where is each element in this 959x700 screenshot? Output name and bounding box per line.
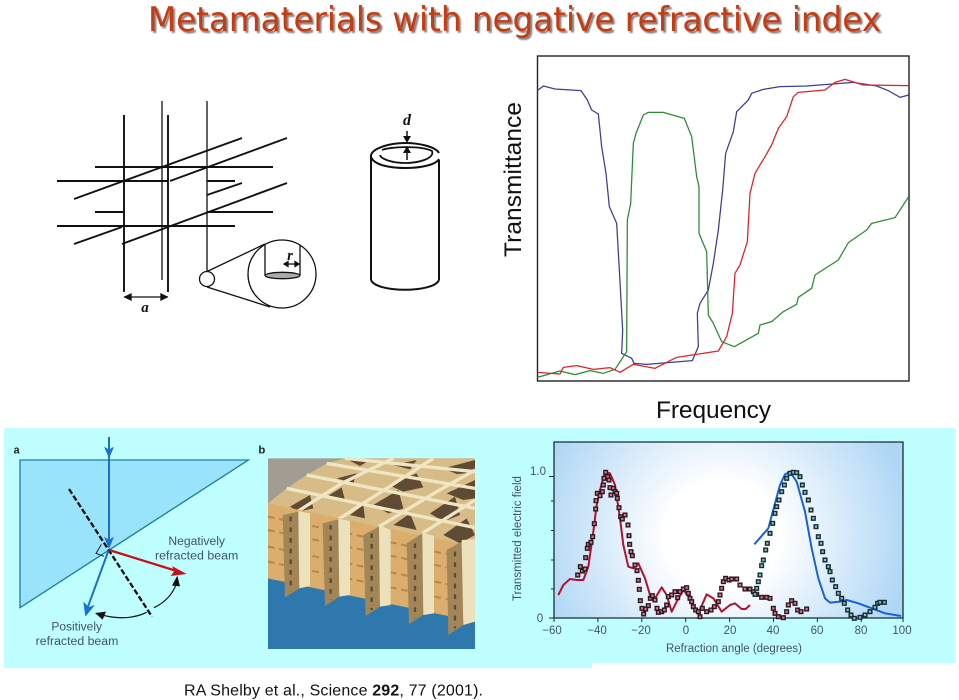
negatively refracted beam [109,550,187,576]
angle arc [95,576,180,620]
axis labels: 0 [537,613,543,625]
ticks [549,476,903,622]
axis labels: −20 [631,625,651,637]
thickness arrows and label d: d [403,112,412,129]
title: Metamaterials with negative refractive index [150,2,883,41]
beam labels: Positively [51,620,103,634]
title: Metamaterials with negative refractive index [148,0,881,39]
plot area [554,442,903,618]
axis labels: 20 [724,625,736,637]
panel letter b: b [258,444,265,456]
positively refracted beam [83,551,108,617]
incident beam [104,437,114,549]
axis labels [512,466,912,655]
panel b: metamaterial photo [268,458,475,649]
red simulated curve [558,472,807,618]
panel: cyan background [4,428,955,668]
blue series [754,472,901,618]
axis labels: 100 [892,625,912,637]
red measured points [578,472,807,618]
upper grid [268,458,475,550]
backdrop [268,458,475,649]
diagram: wire lattice [57,101,316,316]
beam labels: refracted beam [36,634,118,648]
beam labels: refracted beam [155,548,238,562]
axis labels: 0 [683,625,689,637]
spacing a: a [141,300,149,316]
y axis label: Transmittance [500,102,527,257]
chart: transmittance vs frequency [500,56,909,424]
blue curve [537,82,909,364]
axis labels: −60 [542,625,562,637]
panel c: refraction angle chart [512,442,912,655]
axis labels: 60 [811,625,823,637]
green curve [537,112,909,377]
lattice wires [57,101,287,292]
axis labels: Transmitted electric field [512,476,524,601]
red curve [537,79,909,374]
spacing a [124,294,168,316]
magnifier inset [200,240,316,308]
panel letter a: a [14,444,20,456]
axis labels: 80 [855,625,867,637]
axis labels: −40 [587,625,607,637]
normal line [69,489,152,617]
beam labels [36,534,238,648]
fins [283,511,475,635]
axis labels: Refraction angle (degrees) [666,643,802,655]
wedge [20,460,248,608]
plot frame [538,56,909,381]
panel a: refraction diagram [14,437,265,648]
thickness arrows and label d [403,112,412,160]
diagram: split cylinder [371,112,439,290]
front wall [268,503,475,622]
beam labels: Negatively [168,534,226,548]
axis labels: 1.0 [530,466,546,478]
x axis label: Frequency [656,397,772,424]
label r: r [287,248,293,264]
citation: RA Shelby et al., Science 292, 77 (2001). [184,682,483,700]
axis labels: 40 [767,625,779,637]
